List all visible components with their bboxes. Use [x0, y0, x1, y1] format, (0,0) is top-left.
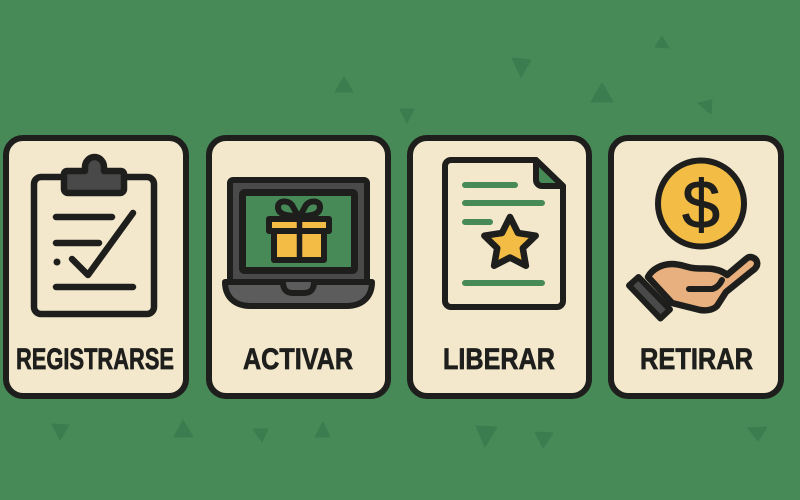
- background triangles: [52, 36, 767, 448]
- icon: document with star: [445, 160, 563, 307]
- icon: coin over hand: $: [682, 167, 720, 243]
- label: registrarse: REGISTRARSE: [16, 343, 174, 376]
- label: liberar: LIBERAR: [443, 343, 555, 376]
- label: retirar: RETIRAR: [640, 343, 753, 376]
- panel: retirar: [611, 138, 781, 396]
- icon: laptop with gift: [225, 180, 372, 306]
- label: activar: ACTIVAR: [243, 343, 353, 376]
- icon: clipboard with checkmark: [34, 157, 154, 314]
- panel: activar: [209, 138, 388, 396]
- icon: coin over hand: [629, 160, 757, 318]
- panel: liberar: [410, 138, 589, 396]
- panel: registrarse: [6, 138, 186, 396]
